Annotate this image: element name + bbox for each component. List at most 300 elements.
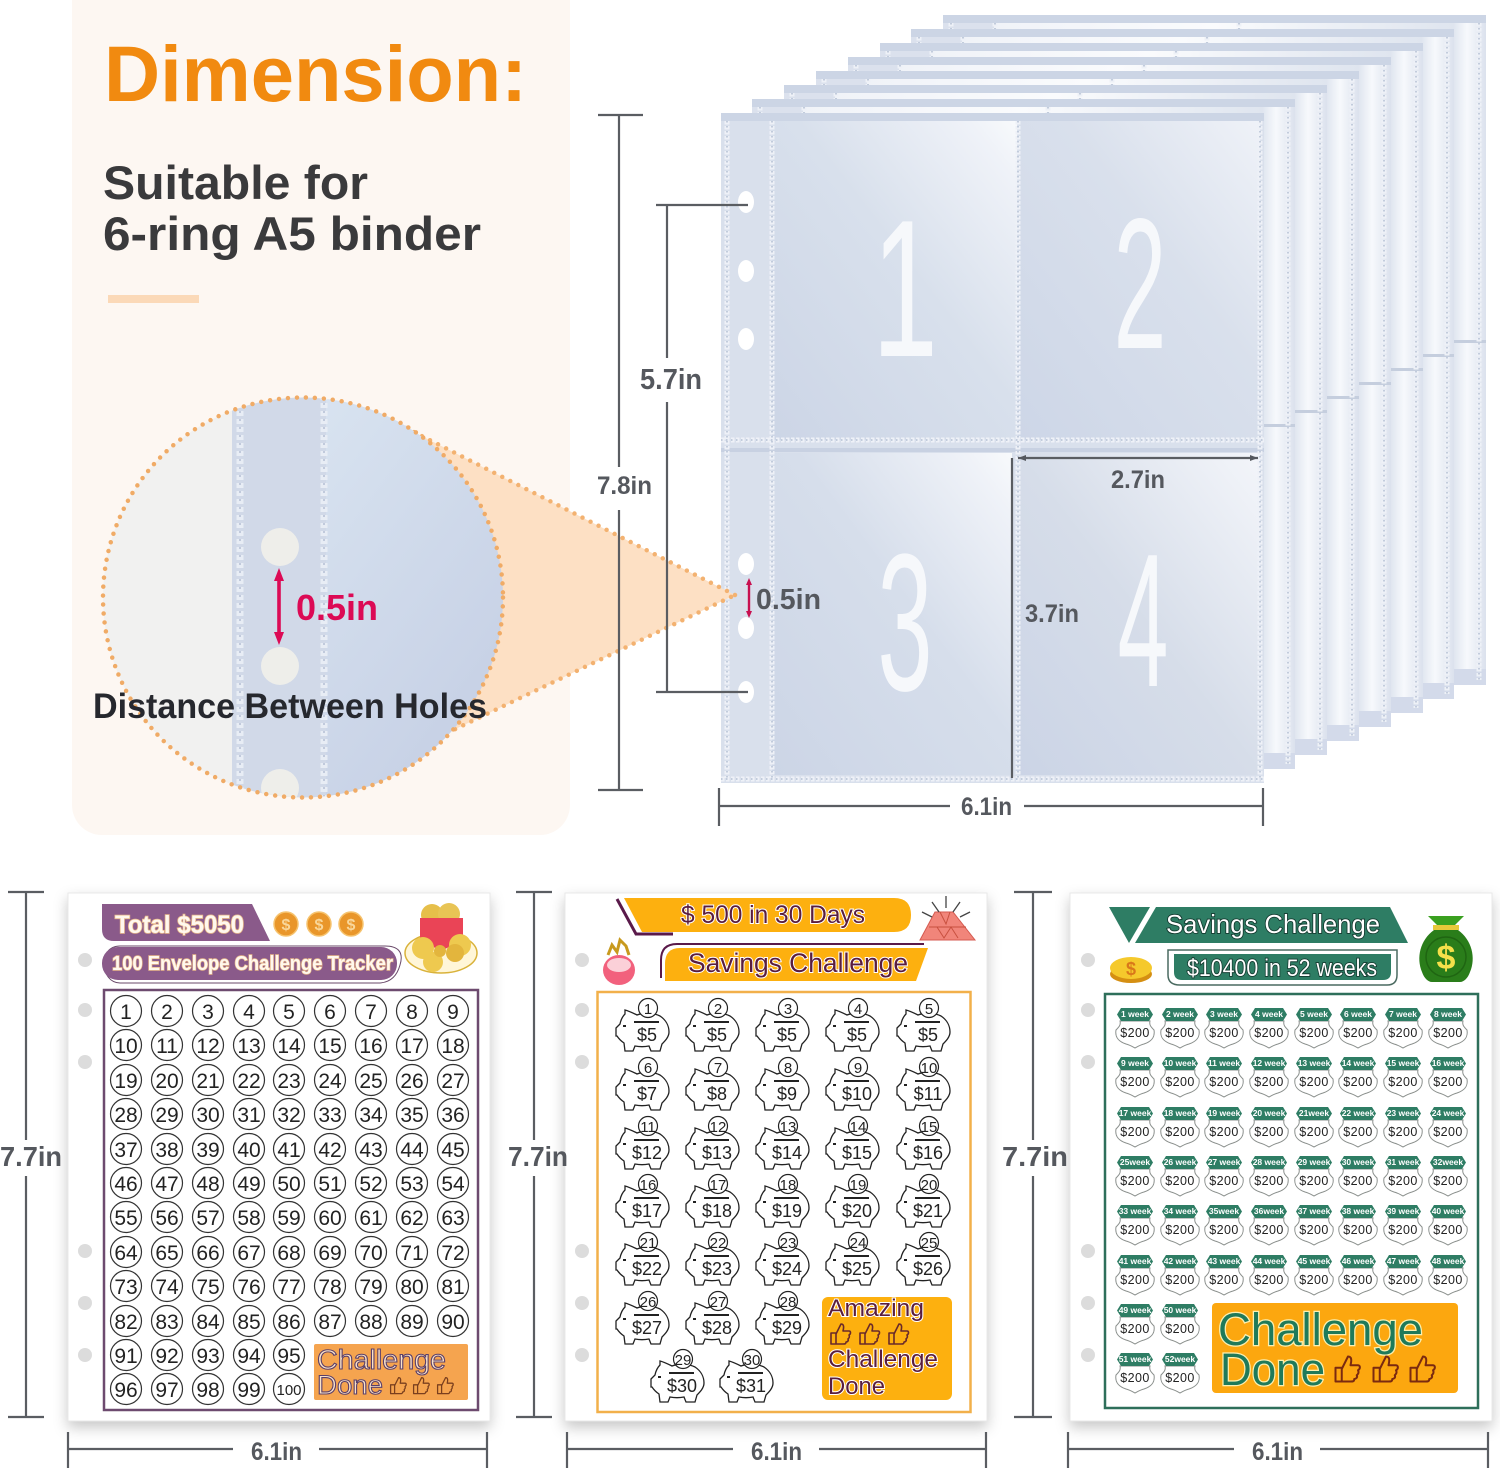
dimension: 3.7in pocket height: 3.7in	[1025, 600, 1079, 628]
weekly shields 1 to 52: 35week	[1209, 1206, 1239, 1216]
piggy banks 1 to 30: 22	[710, 1235, 726, 1252]
banner: 500 in 30 days	[617, 898, 911, 934]
number circles 1 to 100: 89	[400, 1311, 424, 1334]
banner: 500 in 30 days: $ 500 in 30 Days	[681, 901, 865, 929]
piggy banks 1 to 30: 2	[714, 1001, 722, 1018]
dimension: card 2 height 7.7in: 7.7in	[508, 1141, 568, 1172]
challenge done box: Challenge	[317, 1344, 446, 1375]
piggy banks 1 to 30: 28	[780, 1294, 796, 1311]
weekly shields 1 to 52: 39 week	[1387, 1206, 1420, 1216]
piggy banks 1 to 30: $18	[702, 1201, 732, 1221]
weekly shields 1 to 52: $200	[1343, 1174, 1373, 1188]
punch holes	[78, 953, 92, 1362]
piggy banks 1 to 30: 21	[640, 1235, 656, 1252]
weekly shields 1 to 52: $200	[1254, 1174, 1284, 1188]
number circles 1 to 100: 5	[283, 1001, 295, 1024]
amazing challenge done box: Challenge	[828, 1346, 938, 1373]
weekly shields 1 to 52: 5 week	[1300, 1009, 1328, 1019]
number circles 1 to 100: 38	[155, 1139, 179, 1162]
piggy banks 1 to 30: $25	[842, 1259, 872, 1279]
dimension: 2.7in pocket width	[1018, 455, 1258, 494]
number circles 1 to 100: 82	[114, 1311, 138, 1334]
piggy banks 1 to 30: 11	[640, 1119, 656, 1136]
piggy banks 1 to 30: 8	[784, 1060, 792, 1077]
number circles 1 to 100: 19	[114, 1070, 138, 1093]
weekly shields 1 to 52: 36week	[1254, 1206, 1284, 1216]
piggy banks 1 to 30: $23	[702, 1259, 732, 1279]
subtitle: binder compatibility: 6-ring A5 binder	[103, 207, 481, 260]
piggy banks 1 to 30: $5	[707, 1025, 727, 1045]
dimension: card 1 height 7.7in: 7.7in	[0, 1141, 62, 1172]
banner: savings challenge	[1109, 907, 1408, 943]
piggy banks 1 to 30: $9	[777, 1084, 797, 1104]
weekly shields 1 to 52: 43 week	[1208, 1256, 1241, 1266]
weekly shields 1 to 52: 47 week	[1387, 1256, 1420, 1266]
weekly shields 1 to 52: $200	[1433, 1125, 1463, 1139]
weekly shields 1 to 52: $200	[1343, 1223, 1373, 1237]
weekly shields 1 to 52: $200	[1209, 1174, 1239, 1188]
number circles 1 to 100: 23	[277, 1070, 301, 1093]
piggy banks 1 to 30: 29	[675, 1352, 691, 1369]
number circles 1 to 100: 2	[161, 1001, 173, 1024]
number circles 1 to 100: 91	[114, 1345, 138, 1368]
weekly shields 1 to 52: 46 week	[1342, 1256, 1375, 1266]
weekly shields 1 to 52: 15 week	[1387, 1058, 1420, 1068]
number circles 1 to 100: 22	[237, 1070, 261, 1093]
weekly shields 1 to 52: $200	[1209, 1223, 1239, 1237]
number circles 1 to 100: 60	[318, 1207, 342, 1230]
number circles 1 to 100: 13	[237, 1035, 261, 1058]
banner: 10400 in 52 weeks: $10400 in 52 weeks	[1187, 955, 1377, 982]
number circles 1 to 100: 52	[359, 1173, 383, 1196]
piggy banks 1 to 30: 26	[640, 1294, 656, 1311]
weekly shields 1 to 52: 44 week	[1253, 1256, 1286, 1266]
punch holes	[1081, 953, 1095, 1362]
weekly shields 1 to 52: 21week	[1299, 1108, 1329, 1118]
weekly shields 1 to 52	[1116, 1008, 1467, 1393]
weekly shields 1 to 52: 8 week	[1434, 1009, 1462, 1019]
number circles 1 to 100: 98	[196, 1379, 220, 1402]
weekly shields 1 to 52: $200	[1254, 1273, 1284, 1287]
dimension: card 3 height 7.7in	[1002, 892, 1068, 1417]
dimension: 0.5in hole distance	[746, 578, 821, 618]
banner: savings challenge: Savings Challenge	[1166, 909, 1380, 939]
weekly shields 1 to 52: 42 week	[1164, 1256, 1197, 1266]
weekly shields 1 to 52: $200	[1388, 1174, 1418, 1188]
title: Dimension:	[104, 29, 527, 118]
dimension: card 3 width 6.1in: 6.1in	[1252, 1438, 1303, 1466]
piggy banks 1 to 30: 23	[780, 1235, 796, 1252]
weekly shields 1 to 52: $200	[1433, 1223, 1463, 1237]
number circles 1 to 100: 29	[155, 1104, 179, 1127]
number circles 1 to 100: 67	[237, 1242, 261, 1265]
piggy banks 1 to 30: $15	[842, 1143, 872, 1163]
weekly shields 1 to 52: $200	[1299, 1273, 1329, 1287]
number circles 1 to 100: 95	[277, 1345, 301, 1368]
number circles 1 to 100: 65	[155, 1242, 179, 1265]
number circles 1 to 100: 43	[359, 1139, 383, 1162]
weekly shields 1 to 52: 12 week	[1253, 1058, 1286, 1068]
piggy banks 1 to 30: $16	[913, 1143, 943, 1163]
challenge done box: Done	[1220, 1344, 1325, 1395]
banner: total	[102, 904, 270, 941]
number circles 1 to 100: 6	[324, 1001, 336, 1024]
number circles 1 to 100: 10	[114, 1035, 138, 1058]
number circles 1 to 100: 99	[237, 1379, 261, 1402]
weekly shields 1 to 52: 31 week	[1387, 1157, 1420, 1167]
number circles 1 to 100: 66	[196, 1242, 220, 1265]
piggy banks 1 to 30: $20	[842, 1201, 872, 1221]
weekly shields 1 to 52: $200	[1433, 1174, 1463, 1188]
number circles 1 to 100: 93	[196, 1345, 220, 1368]
dimension: 5.7in hole span: 5.7in	[640, 364, 702, 396]
weekly shields 1 to 52: $200	[1120, 1174, 1150, 1188]
piggy banks 1 to 30: $22	[632, 1259, 662, 1279]
piggy banks 1 to 30: 19	[850, 1177, 866, 1194]
piggy banks 1 to 30: $31	[736, 1376, 766, 1396]
icon: money bag	[1419, 916, 1473, 982]
weekly shields 1 to 52: 25week	[1120, 1157, 1150, 1167]
dimension: card 1 width 6.1in: 6.1in	[251, 1438, 302, 1466]
number circles 1 to 100: 8	[406, 1001, 418, 1024]
number circles 1 to 100: 25	[359, 1070, 383, 1093]
weekly shields 1 to 52: 17 week	[1119, 1108, 1152, 1118]
weekly shields 1 to 52: 14 week	[1342, 1058, 1375, 1068]
icon: gold bar pyramid	[920, 896, 975, 940]
piggy banks 1 to 30: $13	[702, 1143, 732, 1163]
piggy banks 1 to 30: $5	[777, 1025, 797, 1045]
piggy banks 1 to 30: 20	[921, 1177, 937, 1194]
dimension: card 2 width 6.1in	[567, 1432, 986, 1468]
number circles 1 to 100: 84	[196, 1311, 220, 1334]
piggy banks 1 to 30: $28	[702, 1318, 732, 1338]
challenge done box: Challenge	[1218, 1304, 1423, 1355]
tracker frame	[1105, 994, 1478, 1408]
dimension: card 3 width 6.1in	[1068, 1432, 1488, 1468]
subtitle: binder compatibility: Suitable for	[103, 156, 368, 209]
number circles 1 to 100: 48	[196, 1173, 220, 1196]
number circles 1 to 100: 21	[196, 1070, 220, 1093]
weekly shields 1 to 52: 26 week	[1164, 1157, 1197, 1167]
weekly shields 1 to 52: 32week	[1433, 1157, 1463, 1167]
number circles 1 to 100: 34	[359, 1104, 383, 1127]
number circles 1 to 100: 70	[359, 1242, 383, 1265]
banner: savings challenge	[661, 944, 928, 981]
weekly shields 1 to 52: $200	[1165, 1125, 1195, 1139]
weekly shields 1 to 52: 37 week	[1298, 1206, 1331, 1216]
weekly shields 1 to 52: $200	[1388, 1026, 1418, 1040]
number circles 1 to 100: 31	[237, 1104, 261, 1127]
weekly shields 1 to 52: $200	[1120, 1273, 1150, 1287]
piggy banks 1 to 30: 24	[850, 1235, 866, 1252]
piggy banks 1 to 30: 27	[710, 1294, 726, 1311]
number circles 1 to 100: 7	[365, 1001, 377, 1024]
weekly shields 1 to 52: $200	[1165, 1174, 1195, 1188]
piggy banks 1 to 30: $17	[632, 1201, 662, 1221]
banner: savings challenge: Savings Challenge	[688, 948, 908, 978]
pocket numbers: 1	[872, 180, 938, 398]
weekly shields 1 to 52: $200	[1120, 1223, 1150, 1237]
number circles 1 to 100: 20	[155, 1070, 179, 1093]
piggy banks 1 to 30: $11	[914, 1084, 942, 1104]
weekly shields 1 to 52: $200	[1120, 1075, 1150, 1089]
weekly shields 1 to 52: $200	[1343, 1075, 1373, 1089]
pocket numbers: 2	[1114, 180, 1166, 388]
weekly shields 1 to 52: 29 week	[1298, 1157, 1331, 1167]
weekly shields 1 to 52: 38 week	[1342, 1206, 1375, 1216]
magnifier cone	[400, 425, 735, 760]
piggy banks 1 to 30: $26	[913, 1259, 943, 1279]
weekly shields 1 to 52: 40 week	[1432, 1206, 1465, 1216]
number circles 1 to 100: 44	[400, 1139, 424, 1162]
number circles 1 to 100: 100	[276, 1382, 302, 1399]
weekly shields 1 to 52: 23 week	[1387, 1108, 1420, 1118]
piggy banks 1 to 30: 17	[710, 1177, 726, 1194]
number circles 1 to 100: 42	[318, 1139, 342, 1162]
weekly shields 1 to 52: $200	[1165, 1273, 1195, 1287]
number circles 1 to 100: 79	[359, 1276, 383, 1299]
icon: money bag: $	[1437, 939, 1456, 977]
number circles 1 to 100: 73	[114, 1276, 138, 1299]
piggy banks 1 to 30: 9	[854, 1060, 862, 1077]
number circles 1 to 100: 76	[237, 1276, 261, 1299]
label: 0.5in zoomed: 0.5in	[296, 587, 378, 628]
weekly shields 1 to 52: 6 week	[1344, 1009, 1372, 1019]
number circles 1 to 100: 9	[447, 1001, 459, 1024]
number circles 1 to 100: 51	[318, 1173, 342, 1196]
piggy banks 1 to 30: 16	[640, 1177, 656, 1194]
weekly shields 1 to 52: $200	[1120, 1125, 1150, 1139]
pocket numbers	[872, 180, 1168, 732]
number circles 1 to 100: 58	[237, 1207, 261, 1230]
dimension: 2.7in pocket width: 2.7in	[1111, 466, 1165, 494]
weekly shields 1 to 52: $200	[1209, 1273, 1239, 1287]
number circles 1 to 100: 11	[156, 1035, 178, 1058]
weekly shields 1 to 52: $200	[1299, 1125, 1329, 1139]
number circles 1 to 100: 81	[441, 1276, 465, 1299]
number circles 1 to 100: 12	[196, 1035, 220, 1058]
weekly shields 1 to 52: $200	[1343, 1026, 1373, 1040]
icon: coin stack: $	[1126, 959, 1136, 979]
number circles 1 to 100: 57	[196, 1207, 220, 1230]
piggy banks 1 to 30: 10	[921, 1060, 937, 1077]
weekly shields 1 to 52: 11 week	[1208, 1058, 1240, 1068]
number circles 1 to 100: 14	[277, 1035, 301, 1058]
weekly shields 1 to 52: 7 week	[1389, 1009, 1417, 1019]
piggy banks 1 to 30: $14	[772, 1143, 802, 1163]
icon: red envelope with gold coins	[405, 903, 477, 973]
number circles 1 to 100: 28	[114, 1104, 138, 1127]
dimension: 6.1in sleeve width: 6.1in	[961, 793, 1012, 821]
challenge done box	[1212, 1303, 1458, 1395]
piggy banks 1 to 30: $19	[772, 1201, 802, 1221]
weekly shields 1 to 52: $200	[1120, 1322, 1150, 1336]
weekly shields 1 to 52: $200	[1120, 1371, 1150, 1385]
card: 100 envelope challenge	[68, 893, 490, 1421]
front sleeve	[721, 113, 1264, 783]
number circles 1 to 100: 72	[441, 1242, 465, 1265]
icon: lucky pot	[603, 940, 635, 985]
number circles 1 to 100: 59	[277, 1207, 301, 1230]
number circles 1 to 100: 74	[155, 1276, 179, 1299]
weekly shields 1 to 52: 2 week	[1166, 1009, 1194, 1019]
piggy banks 1 to 30: $5	[847, 1025, 867, 1045]
piggy banks 1 to 30: $7	[637, 1084, 657, 1104]
weekly shields 1 to 52: $200	[1433, 1273, 1463, 1287]
weekly shields 1 to 52: 1 week	[1121, 1009, 1149, 1019]
piggy banks 1 to 30: $10	[842, 1084, 872, 1104]
weekly shields 1 to 52: $200	[1254, 1026, 1284, 1040]
weekly shields 1 to 52: $200	[1433, 1075, 1463, 1089]
number circles 1 to 100: 40	[237, 1139, 261, 1162]
piggy banks 1 to 30: 30	[744, 1352, 760, 1369]
weekly shields 1 to 52: 3 week	[1210, 1009, 1238, 1019]
weekly shields 1 to 52: 16 week	[1432, 1058, 1465, 1068]
number circles 1 to 100: 35	[400, 1104, 424, 1127]
number circles 1 to 100: 50	[277, 1173, 301, 1196]
weekly shields 1 to 52: 10 week	[1164, 1058, 1197, 1068]
dimension: card 1 width 6.1in	[68, 1432, 487, 1468]
amazing challenge done box	[822, 1295, 952, 1400]
banner: tracker: 100 Envelope Challenge Tracker	[112, 953, 393, 975]
weekly shields 1 to 52: $200	[1343, 1273, 1373, 1287]
number circles 1 to 100: 75	[196, 1276, 220, 1299]
number circles 1 to 100: 94	[237, 1345, 261, 1368]
piggy banks 1 to 30: 3	[784, 1001, 792, 1018]
number circles 1 to 100: 33	[318, 1104, 342, 1127]
number circles 1 to 100: 87	[318, 1311, 342, 1334]
challenge done box	[314, 1344, 468, 1400]
amazing challenge done box: Amazing	[828, 1295, 924, 1322]
number circles 1 to 100: 3	[202, 1001, 214, 1024]
piggy banks 1 to 30: 18	[780, 1177, 796, 1194]
number circles 1 to 100: 64	[114, 1242, 138, 1265]
weekly shields 1 to 52: 18 week	[1164, 1108, 1197, 1118]
weekly shields 1 to 52: $200	[1165, 1322, 1195, 1336]
weekly shields 1 to 52: $200	[1209, 1125, 1239, 1139]
number circles 1 to 100: 30	[196, 1104, 220, 1127]
dimension: 6.1in sleeve width	[719, 788, 1263, 826]
magnified hole detail	[93, 395, 506, 807]
number circles 1 to 100: 71	[400, 1242, 424, 1265]
piggy banks 1 to 30: $12	[632, 1143, 662, 1163]
number circles 1 to 100: 86	[277, 1311, 301, 1334]
weekly shields 1 to 52: $200	[1254, 1125, 1284, 1139]
number circles 1 to 100: 1	[120, 1001, 132, 1024]
weekly shields 1 to 52: $200	[1165, 1223, 1195, 1237]
number circles 1 to 100: 77	[277, 1276, 301, 1299]
weekly shields 1 to 52: $200	[1165, 1075, 1195, 1089]
weekly shields 1 to 52: $200	[1299, 1026, 1329, 1040]
piggy banks 1 to 30: 12	[710, 1119, 726, 1136]
number circles 1 to 100: 62	[400, 1207, 424, 1230]
piggy banks 1 to 30	[616, 998, 950, 1402]
piggy banks 1 to 30: $21	[913, 1201, 943, 1221]
weekly shields 1 to 52: 9 week	[1121, 1058, 1149, 1068]
weekly shields 1 to 52: $200	[1120, 1026, 1150, 1040]
weekly shields 1 to 52: 41 week	[1119, 1256, 1152, 1266]
number circles 1 to 100: 27	[441, 1070, 465, 1093]
number circles 1 to 100: 18	[441, 1035, 465, 1058]
weekly shields 1 to 52: 51 week	[1119, 1354, 1152, 1364]
icons: coins	[274, 912, 363, 936]
weekly shields 1 to 52: $200	[1299, 1075, 1329, 1089]
weekly shields 1 to 52: $200	[1433, 1026, 1463, 1040]
weekly shields 1 to 52: $200	[1254, 1075, 1284, 1089]
number circles 1 to 100: 96	[114, 1379, 138, 1402]
binder holes	[738, 191, 754, 703]
weekly shields 1 to 52: $200	[1209, 1026, 1239, 1040]
number circles 1 to 100: 80	[400, 1276, 424, 1299]
number circles 1 to 100: 83	[155, 1311, 179, 1334]
number circles 1 to 100: 55	[114, 1207, 138, 1230]
challenge done box: Done	[317, 1370, 383, 1400]
accent bar	[108, 295, 199, 303]
number circles 1 to 100: 97	[155, 1379, 179, 1402]
subtitle: binder compatibility	[103, 156, 481, 260]
dimension: card 2 width 6.1in: 6.1in	[751, 1438, 802, 1466]
weekly shields 1 to 52: 22 week	[1342, 1108, 1375, 1118]
panel: dimension summary	[72, 0, 570, 835]
number circles 1 to 100: 46	[114, 1173, 138, 1196]
piggy banks 1 to 30: 4	[854, 1001, 862, 1018]
weekly shields 1 to 52: 49 week	[1119, 1305, 1152, 1315]
number circles 1 to 100: 41	[277, 1139, 301, 1162]
banner: 10400 in 52 weeks	[1168, 950, 1397, 985]
number circles 1 to 100: 36	[441, 1104, 465, 1127]
dimension: 0.5in hole distance: 0.5in	[756, 584, 821, 616]
number circles 1 to 100: 45	[441, 1139, 465, 1162]
piggy banks 1 to 30: 15	[921, 1119, 937, 1136]
stack of binder sleeves	[721, 15, 1486, 783]
icon: coin stack	[1110, 957, 1152, 983]
piggy banks 1 to 30: 5	[925, 1001, 933, 1018]
number circles 1 to 100: 4	[243, 1001, 255, 1024]
number circles 1 to 100: 47	[155, 1173, 179, 1196]
weekly shields 1 to 52: 27 week	[1208, 1157, 1241, 1167]
piggy banks 1 to 30: $30	[667, 1376, 697, 1396]
dimension: card 2 height 7.7in	[508, 892, 568, 1417]
piggy banks 1 to 30: 13	[780, 1119, 796, 1136]
number circles 1 to 100: 54	[441, 1173, 465, 1196]
weekly shields 1 to 52: 34 week	[1164, 1206, 1197, 1216]
number circles 1 to 100: 26	[400, 1070, 424, 1093]
pink arrow: hole spacing	[274, 568, 284, 645]
weekly shields 1 to 52: $200	[1388, 1075, 1418, 1089]
tracker frame	[598, 992, 970, 1412]
weekly shields 1 to 52: 24 week	[1432, 1108, 1465, 1118]
dimension: 7.8in height: 7.8in	[597, 472, 652, 500]
weekly shields 1 to 52: $200	[1165, 1026, 1195, 1040]
piggy banks 1 to 30: 25	[921, 1235, 937, 1252]
number circles 1 to 100: 63	[441, 1207, 465, 1230]
weekly shields 1 to 52: $200	[1388, 1125, 1418, 1139]
punch holes	[575, 953, 589, 1362]
number circles 1 to 100: 61	[359, 1207, 383, 1230]
number circles 1 to 100: 39	[196, 1139, 220, 1162]
weekly shields 1 to 52: 4 week	[1255, 1009, 1283, 1019]
weekly shields 1 to 52: $200	[1165, 1371, 1195, 1385]
number circles 1 to 100: 90	[441, 1311, 465, 1334]
banner: tracker	[102, 946, 401, 983]
weekly shields 1 to 52: 28 week	[1253, 1157, 1286, 1167]
pocket numbers: 4	[1118, 514, 1168, 727]
dimension: card 1 height 7.7in	[0, 892, 62, 1417]
number circles 1 to 100: 15	[318, 1035, 342, 1058]
label: distance between holes: Distance Between Holes	[93, 687, 487, 726]
weekly shields 1 to 52: 20 week	[1253, 1108, 1286, 1118]
piggy banks 1 to 30: $5	[918, 1025, 938, 1045]
